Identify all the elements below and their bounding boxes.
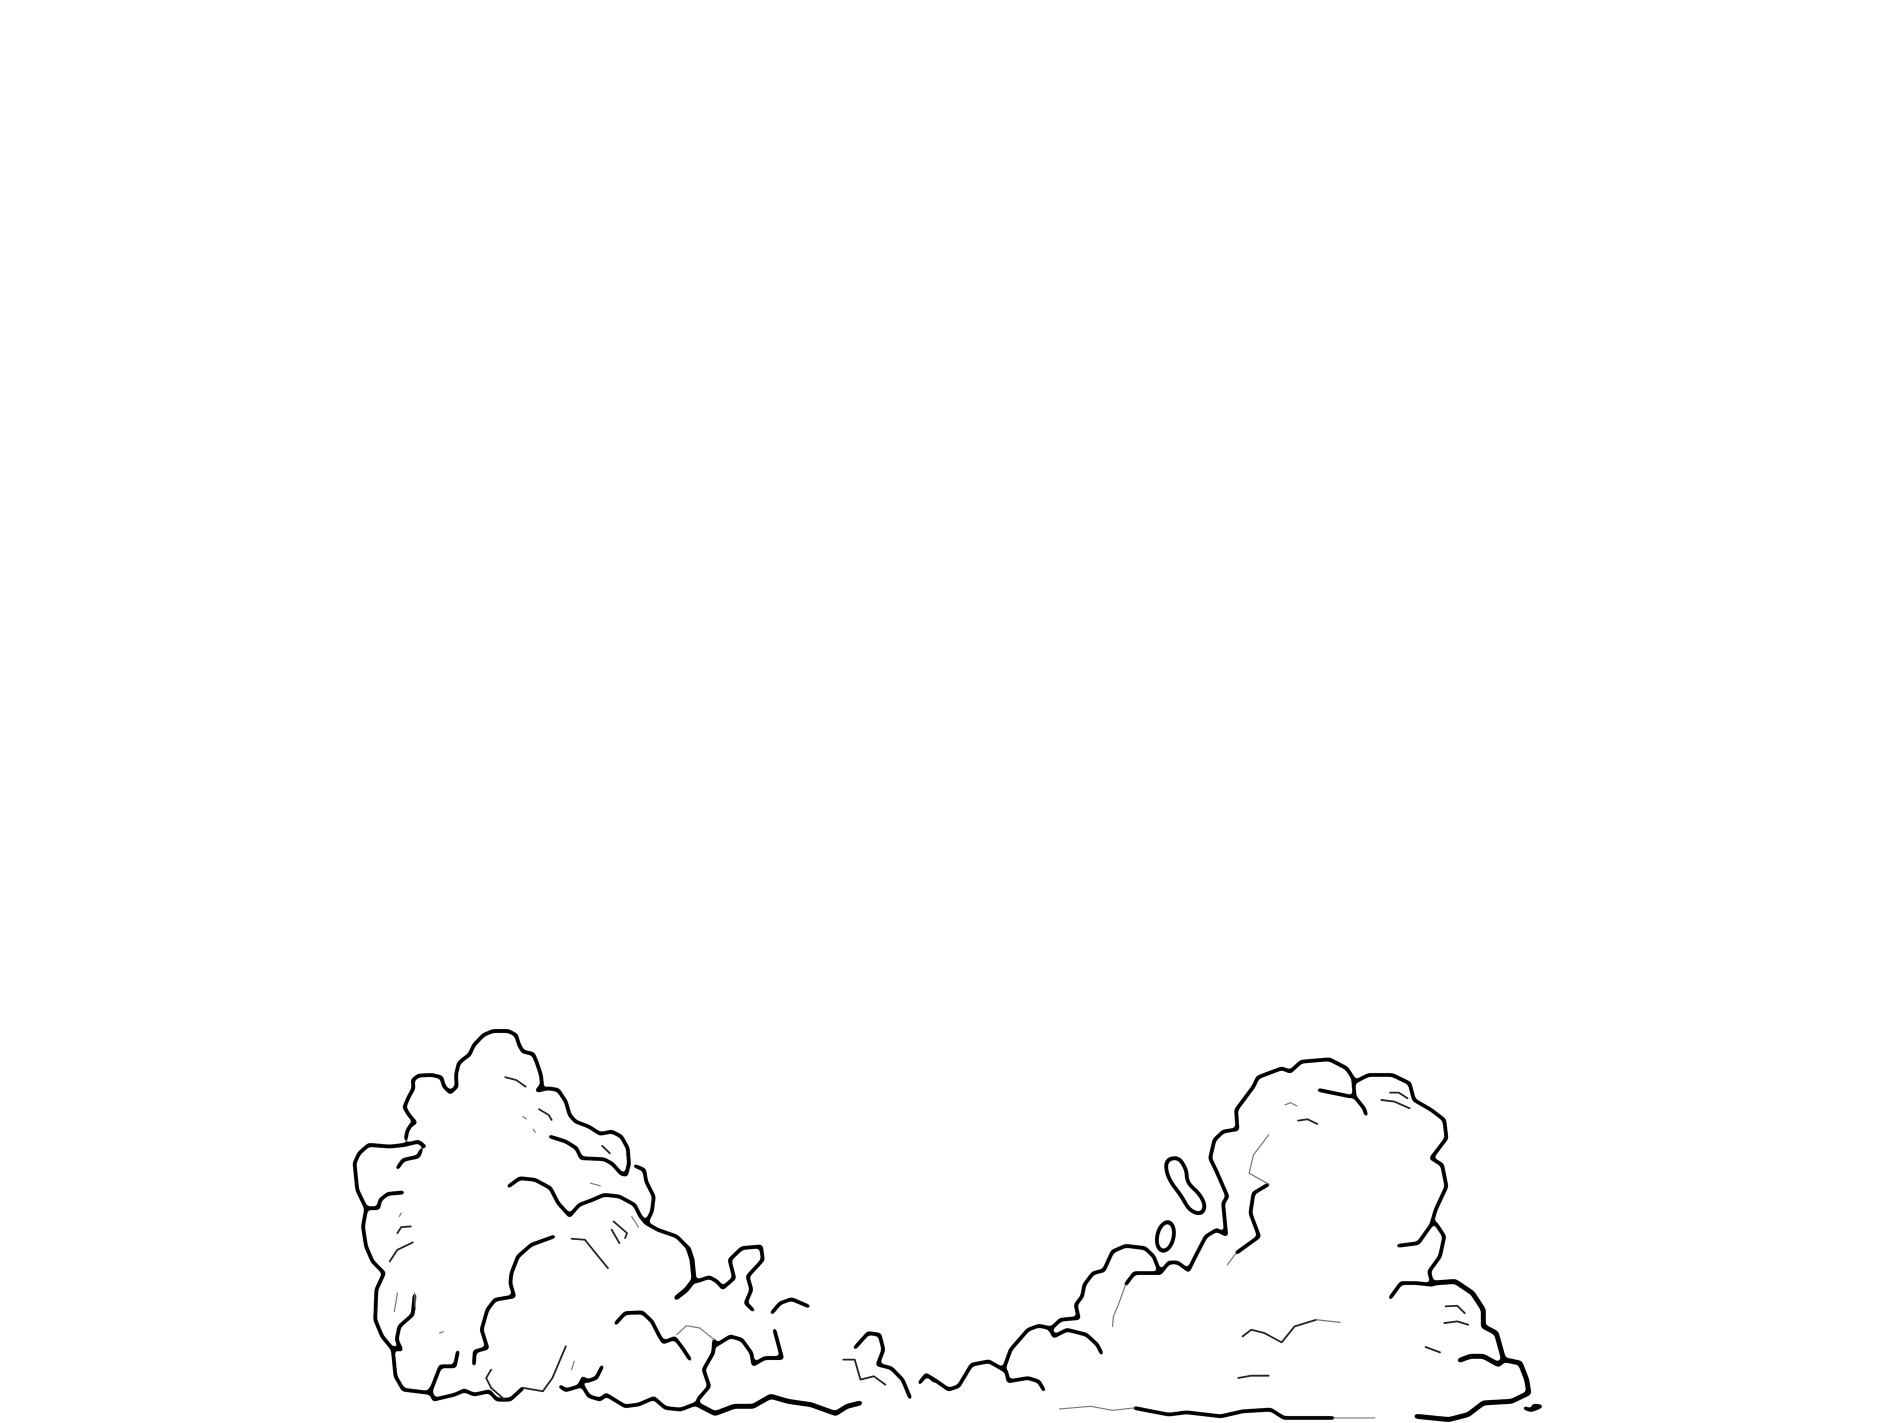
right cloud xyxy=(920,1059,1541,1420)
left cloud xyxy=(355,1031,940,1414)
